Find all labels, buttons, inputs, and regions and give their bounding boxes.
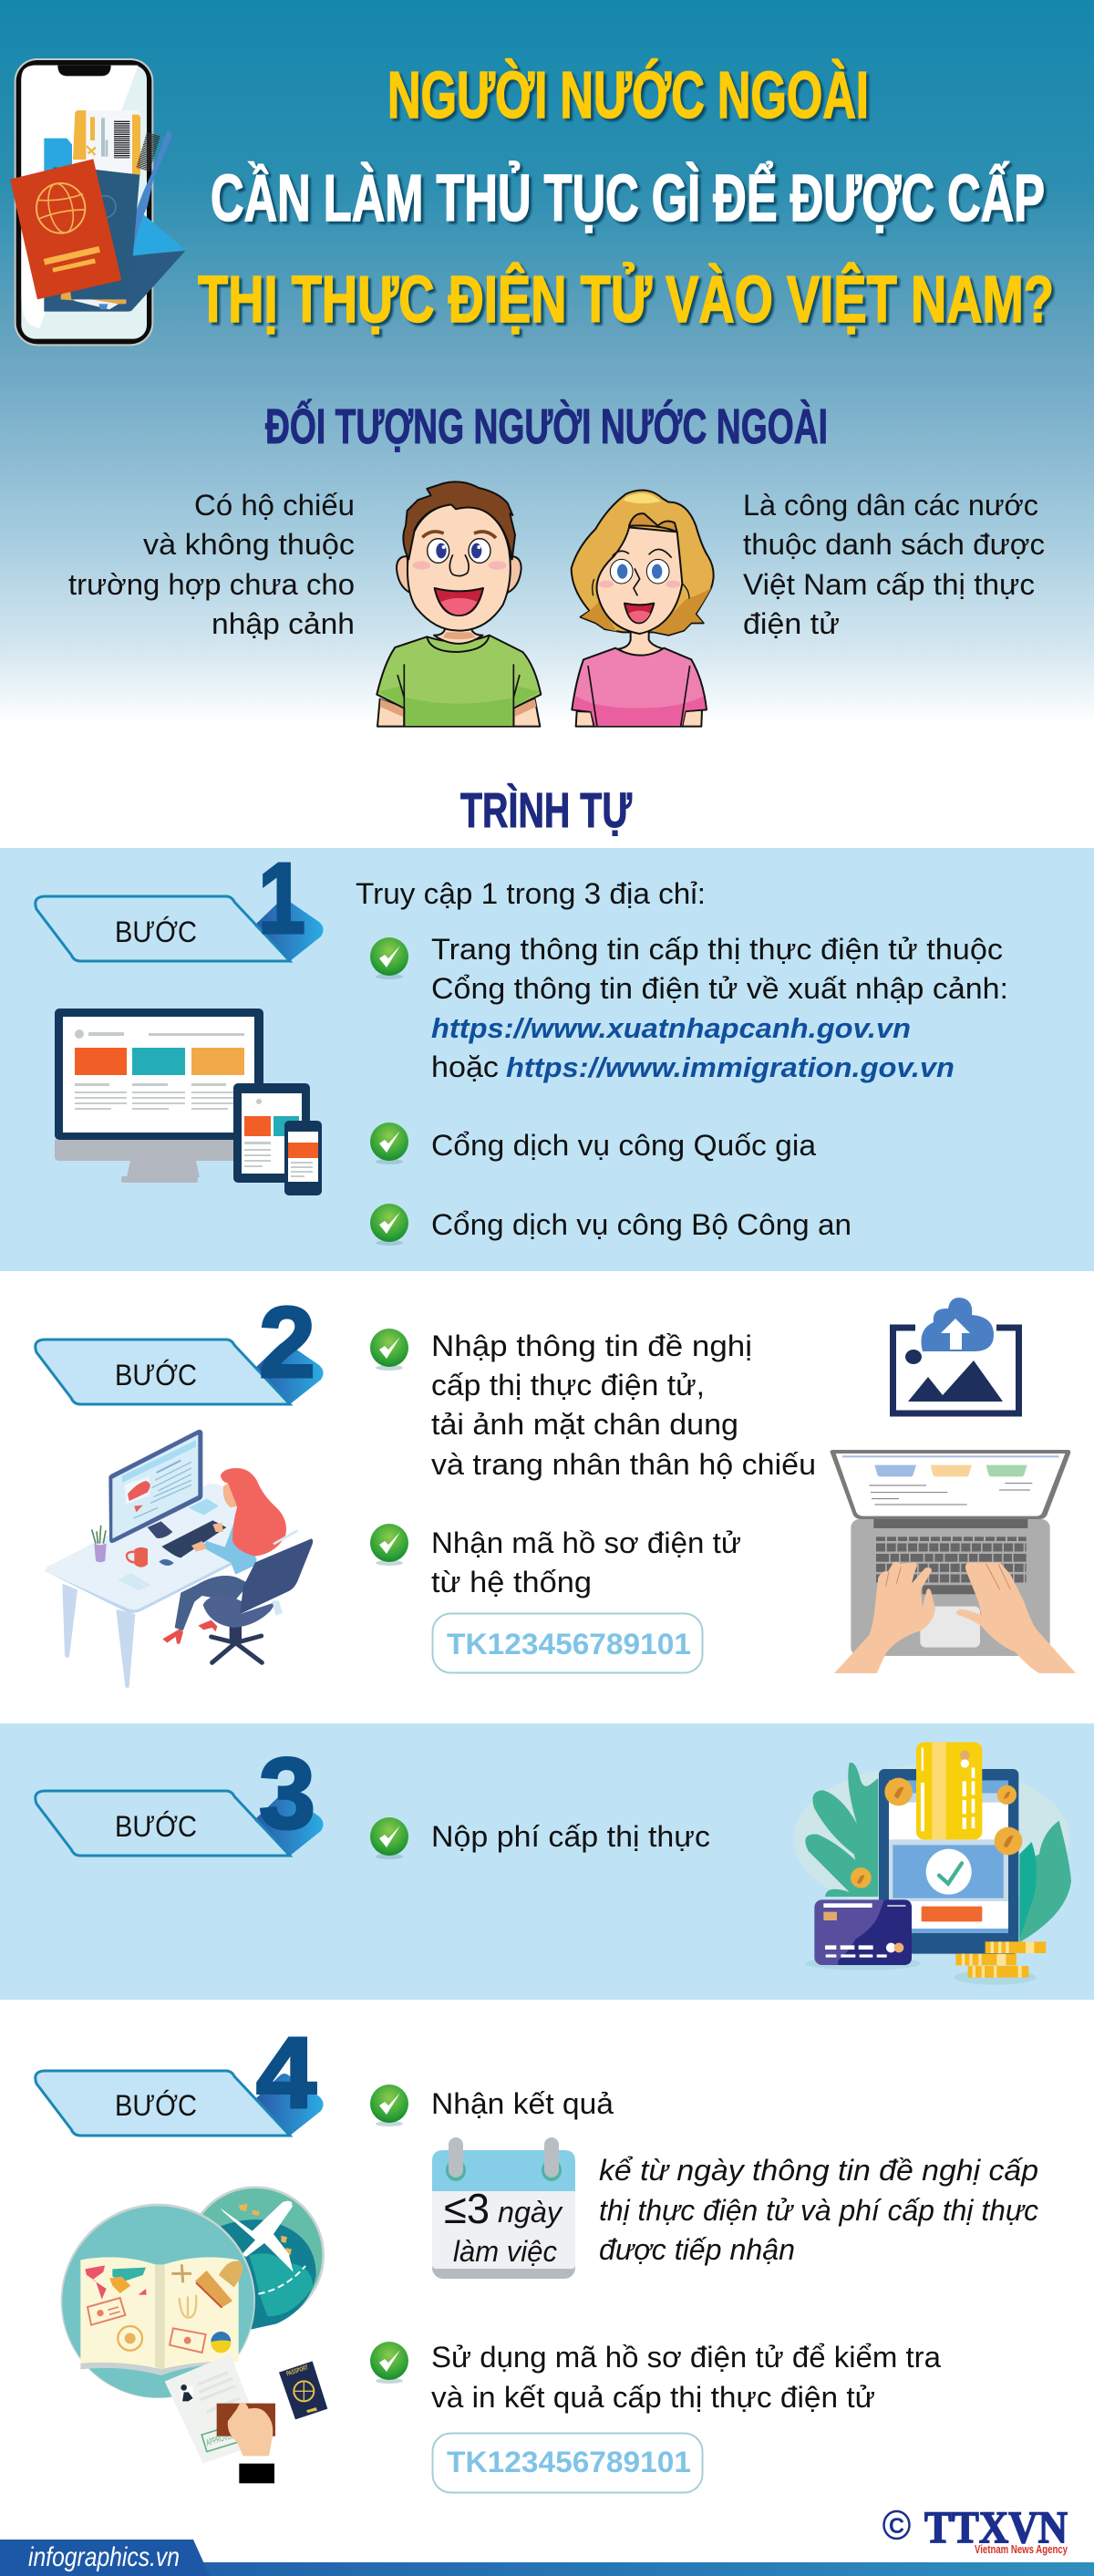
code box: TK123456789101	[447, 2446, 691, 2478]
step 1 intro: Truy cập 1 trong 3 địa chỉ:	[356, 877, 706, 910]
logo: copyright TTXVN: TTXVN	[924, 2501, 1068, 2552]
icon: phone with passports	[10, 58, 185, 346]
icon: woman	[572, 491, 714, 727]
icon: passport, globe and stamp	[61, 2186, 327, 2483]
step 4 badge: BƯỚC	[115, 2089, 197, 2122]
check icon	[370, 937, 408, 979]
item: check and print: và in kết quả cấp thị thực điện tử	[431, 2381, 875, 2414]
item: ministry portal: Cổng dịch vụ công Bộ Công an	[431, 1208, 851, 1241]
item: visa portal: Cổng thông tin điện tử về xuất nhập cảnh:	[431, 972, 1008, 1005]
item: receive result: Nhận kết quả	[431, 2087, 614, 2120]
icon: passport, globe and stamp: PASSPORT	[285, 2363, 309, 2378]
item: receive code: Nhận mã hồ sơ điện tử	[431, 1526, 741, 1559]
text block: passport condition: Có hộ chiếu	[194, 489, 355, 522]
icon: payment illustration	[793, 1743, 1071, 1985]
item: check and print: Sử dụng mã hồ sơ điện tử để kiểm tra	[431, 2341, 941, 2374]
check icon	[370, 2342, 408, 2384]
item: enter information: tải ảnh mặt chân dung	[431, 1408, 738, 1441]
check icon	[370, 2085, 408, 2126]
icon: calendar with working days: ≤3	[444, 2185, 490, 2232]
footer bar	[0, 2540, 1094, 2576]
icon: passport, globe and stamp: APPROVED	[205, 2430, 235, 2448]
check icon	[370, 1204, 408, 1246]
code box	[432, 2433, 702, 2493]
step 1 badge: BƯỚC	[115, 916, 197, 948]
item: check and print	[431, 2341, 941, 2414]
panel: step 4	[36, 2017, 1038, 2493]
check icon	[370, 1524, 408, 1566]
code box: TK123456789101	[447, 1628, 691, 1660]
item: enter information	[431, 1329, 816, 1481]
logo: copyright TTXVN: C	[889, 2514, 904, 2539]
step 3 badge: 3	[259, 1738, 315, 1850]
icon: man	[377, 481, 541, 727]
text block: timing note	[599, 2154, 1038, 2266]
panel: step 2	[36, 1287, 1076, 1688]
logo: copyright TTXVN	[884, 2501, 1068, 2556]
item: visa portal: Trang thông tin cấp thị thực điện tử thuộc	[431, 933, 1003, 966]
text block: timing note: kể từ ngày thông tin đề nghị cấp	[599, 2154, 1038, 2187]
panel: step 1	[0, 843, 1094, 1271]
icon: laptop with hands	[831, 1450, 1076, 1673]
icon: image upload	[893, 1298, 1019, 1413]
step 4 badge: 4	[256, 2017, 316, 2129]
step 2 badge: BƯỚC	[115, 1359, 197, 1391]
item: visa portal: hoặc	[431, 1050, 499, 1083]
item: enter information: cấp thị thực điện tử,	[431, 1369, 705, 1402]
text block: timing note: thị thực điện tử và phí cấp thị thực	[599, 2194, 1038, 2227]
text block: eligible citizens: điện tử	[743, 607, 840, 640]
text block: eligible citizens: thuộc danh sách được	[743, 528, 1045, 561]
text block: eligible citizens	[743, 489, 1045, 640]
text block: passport condition: trường hợp chưa cho	[68, 568, 355, 601]
header gradient background	[0, 0, 1094, 725]
step 2 badge: 2	[259, 1287, 315, 1399]
item: visa portal: https://www.immigration.gov.vn	[506, 1051, 955, 1083]
step 3 badge: BƯỚC	[115, 1810, 197, 1843]
title	[198, 58, 1054, 336]
text block: eligible citizens: Việt Nam cấp thị thực	[743, 568, 1035, 601]
step 1 badge: 1	[258, 843, 305, 955]
item: visa portal	[431, 933, 1008, 1083]
item: pay fee: Nộp phí cấp thị thực	[431, 1820, 710, 1853]
text block: passport condition: và không thuộc	[143, 528, 355, 561]
item: enter information: và trang nhân thân hộ chiếu	[431, 1448, 816, 1481]
heading: foreign applicants: ĐỐI TƯỢNG NGƯỜI NƯỚC NGOÀI	[265, 399, 828, 454]
code box	[432, 1614, 702, 1672]
icon: calendar with working days: làm việc	[453, 2235, 557, 2268]
text block: passport condition	[68, 489, 355, 640]
text block: timing note: được tiếp nhận	[599, 2233, 795, 2266]
text block: eligible citizens: Là công dân các nước	[743, 489, 1038, 522]
check icon	[370, 1817, 408, 1859]
step 3 badge	[36, 1738, 324, 1856]
step 2 badge	[36, 1287, 324, 1404]
footer site label: infographics.vn	[28, 2542, 180, 2572]
title: NGƯỜI NƯỚC NGOÀI	[387, 58, 869, 132]
item: national portal: Cổng dịch vụ công Quốc gia	[431, 1129, 816, 1162]
item: enter information: Nhập thông tin đề nghị	[431, 1329, 752, 1362]
item: visa portal: https://www.xuatnhapcanh.gov.vn	[431, 1012, 911, 1044]
item: receive code	[431, 1526, 741, 1598]
step 4 badge	[36, 2017, 324, 2136]
check icon	[370, 1122, 408, 1164]
icon: responsive devices	[55, 1009, 322, 1195]
icon: calendar with working days: ngày	[498, 2196, 563, 2229]
step 1 badge	[36, 843, 324, 961]
icon: calendar with working days	[432, 2137, 575, 2279]
heading: sequence: TRÌNH TỰ	[460, 783, 632, 838]
check icon	[370, 1329, 408, 1371]
text block: passport condition: nhập cảnh	[212, 607, 355, 640]
item: receive code: từ hệ thống	[431, 1566, 592, 1598]
panel: step 3	[0, 1723, 1094, 2000]
icon: woman at desk	[46, 1430, 313, 1688]
